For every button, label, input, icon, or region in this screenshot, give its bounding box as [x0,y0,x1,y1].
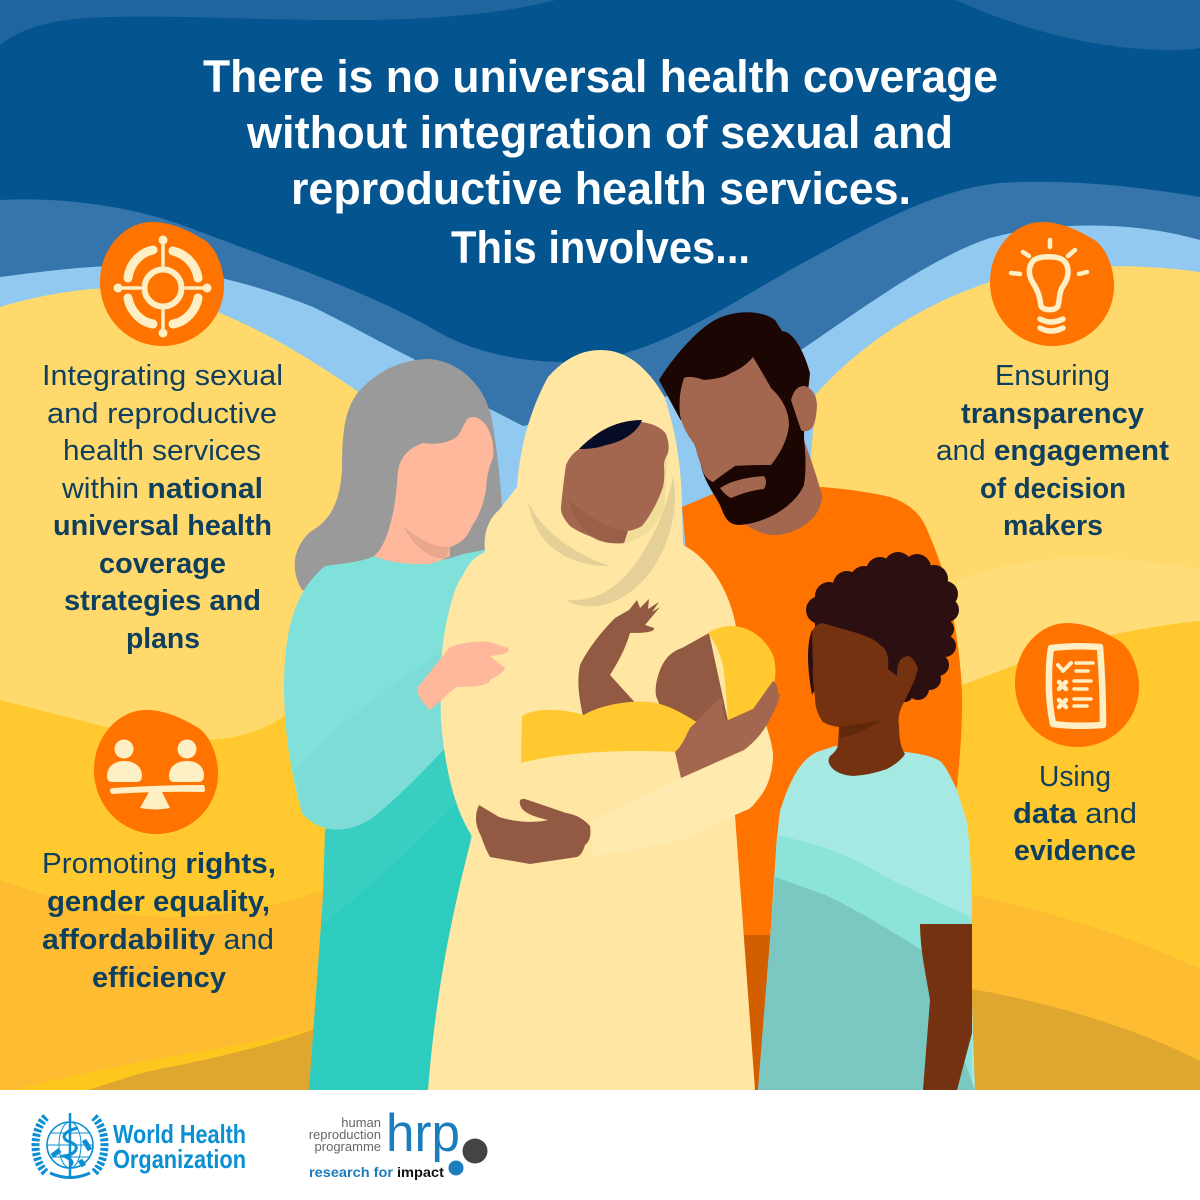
figure: child [758,552,975,1090]
illustration: family group [284,312,975,1090]
logo: human reproduction programme: reproduction [309,1127,381,1142]
text: data and evidence: Using [1039,761,1111,793]
logo: human reproduction programme: hrp [386,1104,460,1163]
text: integrating services: within national [61,473,263,505]
figure: grandmother hand [418,642,509,710]
logo: human reproduction programme: research for [309,1164,394,1180]
text: integrating services: plans [126,623,200,655]
text: integrating services: Integrating sexual [42,360,283,392]
icon: checklist document [1015,623,1139,747]
text: data and evidence: evidence [1014,835,1136,867]
logo: human reproduction programme: human [341,1115,381,1130]
title: without integration of sexual and [246,107,953,158]
icon: target with crosshair [100,222,224,346]
logo: human reproduction programme: impact [397,1164,444,1180]
figure: mother hands [476,681,780,864]
text: integrating services: universal health [53,510,272,542]
text: integrating services: strategies and [64,585,261,617]
title [203,51,998,273]
text: rights and equality: gender equality, [47,886,270,918]
text: transparency: and engagement [936,435,1169,467]
logo: World Health Organization [36,1113,246,1178]
text: rights and equality [42,848,276,994]
footer band [0,1090,1200,1200]
text: integrating services [42,360,283,655]
text: transparency: of decision [980,473,1126,505]
logo: human reproduction programme: programme [315,1139,381,1154]
logo: World Health Organization: World Health [113,1119,246,1149]
text: transparency: transparency [961,398,1144,430]
text: transparency: Ensuring [995,360,1110,392]
figure: child arm [920,924,972,1090]
text: integrating services: health services [63,435,261,467]
text: data and evidence: data and [1013,798,1137,830]
title: This involves... [451,222,750,273]
text: transparency [936,360,1169,542]
title: reproductive health services. [291,163,911,214]
title: There is no universal health coverage [203,51,998,102]
figure: baby [521,599,775,763]
logo: World Health Organization: Organization [113,1144,246,1174]
icon: light bulb [990,222,1114,346]
text: transparency: makers [1003,510,1103,542]
figure: grandmother [284,359,503,1090]
text: data and evidence [1013,761,1137,867]
icon: balance with two people [94,710,218,834]
text: rights and equality: affordability and [42,924,274,956]
icon: WHO emblem [36,1113,104,1178]
text: integrating services: coverage [99,548,226,580]
text: integrating services: and reproductive [47,398,277,430]
figure: man [659,312,962,1090]
text: rights and equality: Promoting rights, [42,848,276,880]
text: rights and equality: efficiency [92,962,226,994]
figure: mother in headscarf [428,350,773,1090]
logo: human reproduction programme [309,1104,488,1180]
